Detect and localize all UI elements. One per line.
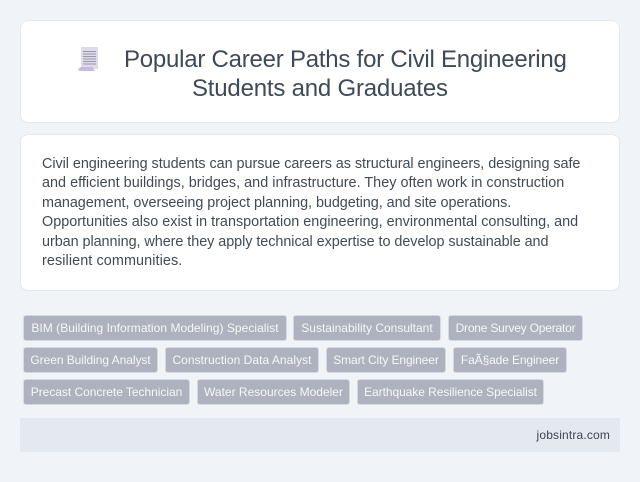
title: Students and Graduates xyxy=(192,75,448,102)
tag: BIM specialist xyxy=(23,315,287,341)
tag: precast concrete technician xyxy=(23,379,190,405)
tag: facade engineer xyxy=(453,347,567,373)
icon: document scroll xyxy=(78,47,98,71)
footer text: jobsintra.com xyxy=(537,428,610,442)
tag: BIM specialist: BIM (Building Information Modeling) Specialist xyxy=(31,321,279,335)
tag: smart city engineer xyxy=(326,347,446,373)
tag: earthquake resilience specialist xyxy=(357,379,544,405)
tag: facade engineer: FaÃ§ade Engineer xyxy=(461,353,559,367)
description panel xyxy=(20,134,620,291)
description text: Civil engineering students can pursue careers as structural engineers, designing safe xyxy=(42,156,580,172)
tag: precast concrete technician: Precast Concrete Technician xyxy=(31,385,182,399)
tag: sustainability consultant: Sustainability Consultant xyxy=(301,321,433,335)
tag: construction data analyst: Construction Data Analyst xyxy=(172,353,312,367)
footer bar xyxy=(20,418,620,452)
career tags xyxy=(23,315,583,405)
description text: Opportunities also exist in transportation engineering, environmental consulting, and xyxy=(42,214,578,230)
header panel xyxy=(20,20,620,123)
title xyxy=(124,46,567,102)
description text: urban planning, where they apply technical expertise to develop sustainable and xyxy=(42,234,548,250)
tag: water resources modeler xyxy=(197,379,350,405)
tag: earthquake resilience specialist: Earthquake Resilience Specialist xyxy=(364,385,537,399)
tag: construction data analyst xyxy=(165,347,319,373)
tag: water resources modeler: Water Resources Modeler xyxy=(204,385,343,399)
description text xyxy=(42,156,580,269)
tag: drone survey operator: Drone Survey Operator xyxy=(456,321,575,335)
tag: sustainability consultant xyxy=(293,315,441,341)
description text: and efficient buildings, bridges, and infrastructure. They often work in construction xyxy=(42,175,564,191)
title: Popular Career Paths for Civil Engineering xyxy=(124,46,567,73)
description text: management, overseeing project planning, budgeting, and site operations. xyxy=(42,195,511,211)
tag: drone survey operator xyxy=(448,315,583,341)
tag: smart city engineer: Smart City Engineer xyxy=(333,353,439,367)
tag: green building analyst: Green Building Analyst xyxy=(30,353,151,367)
tag: green building analyst xyxy=(23,347,158,373)
description text: resilient communities. xyxy=(42,253,182,269)
